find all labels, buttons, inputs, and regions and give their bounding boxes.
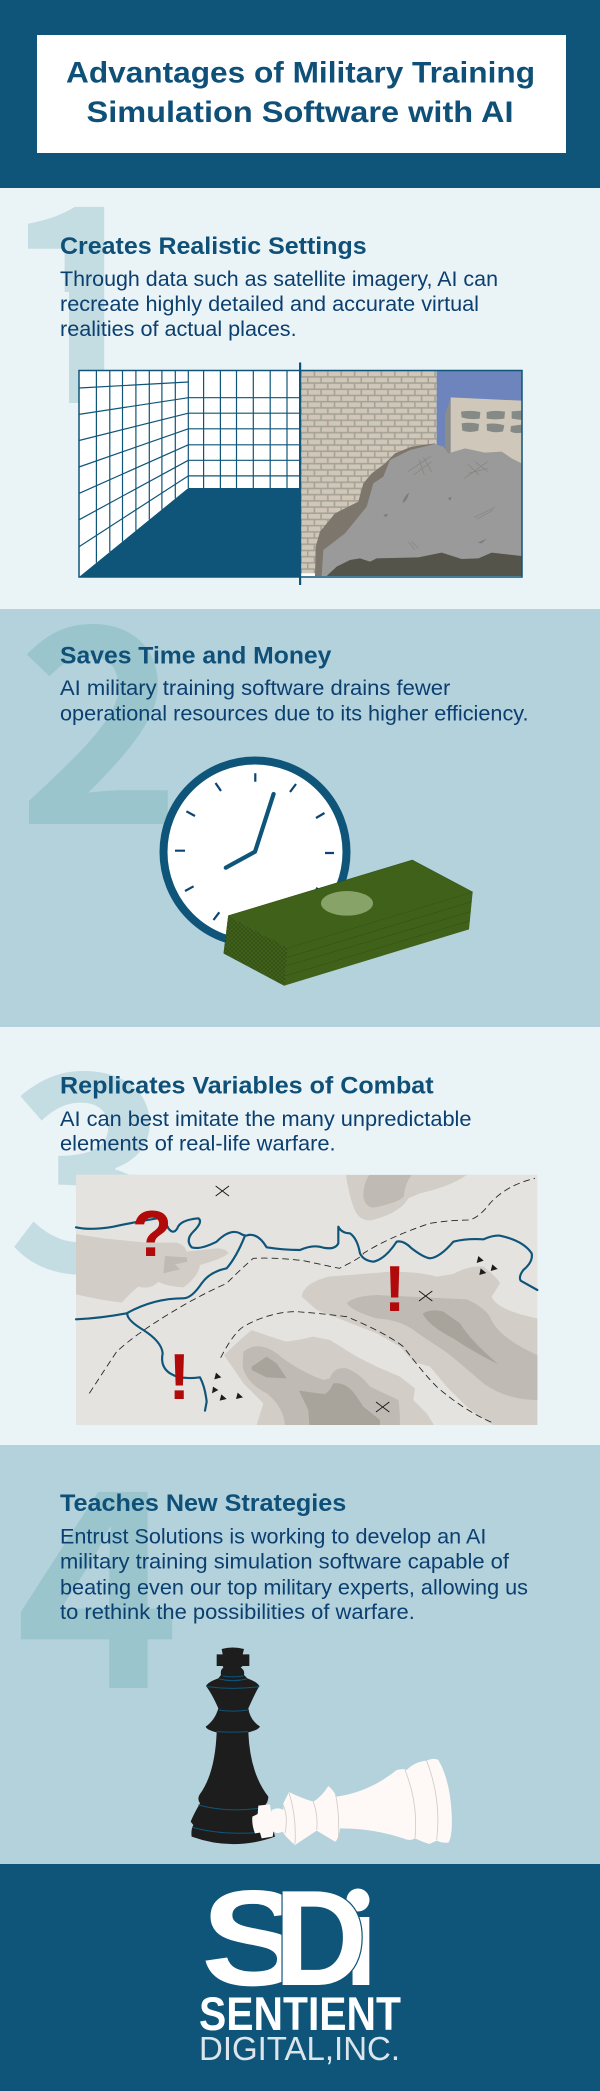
logo: SDi: i <box>344 1862 378 2014</box>
panel: creates realistic settings <box>28 206 523 585</box>
title box: Simulation Software with AI <box>86 96 514 129</box>
white king <box>252 1759 452 1845</box>
logo: SDi: S <box>201 1862 305 2014</box>
logo wordmark <box>199 1987 401 2067</box>
numeral 1: 1 <box>0 88 159 482</box>
x markers <box>216 1186 432 1412</box>
river <box>76 1218 537 1411</box>
body text 2 <box>60 677 528 726</box>
dashed routes <box>89 1178 535 1422</box>
troop markers <box>212 1256 498 1401</box>
illustration frame <box>79 370 522 577</box>
body text 2: operational resources due to its higher efficiency. <box>60 703 528 726</box>
map terrain and routes <box>76 1175 537 1425</box>
logo wordmark: SENTIENT <box>199 1987 401 2040</box>
title box: Advantages of Military Training <box>66 56 535 90</box>
logo: SDi <box>206 1888 370 1986</box>
body text 3: AI can best imitate the many unpredictable <box>60 1108 472 1131</box>
body text 1 <box>60 268 498 341</box>
heading 2: Saves Time and Money <box>60 642 332 669</box>
body text 1: recreate highly detailed and accurate virtual <box>60 293 479 316</box>
body text 4: military training simulation software capable of <box>60 1551 509 1574</box>
body text 4: beating even our top military experts, allowing us <box>60 1576 528 1599</box>
realistic ruined scene <box>301 371 522 576</box>
heading 3: Replicates Variables of Combat <box>60 1072 434 1099</box>
icon: chess kings <box>191 1647 452 1845</box>
body text 4: Entrust Solutions is working to develop an AI <box>60 1525 486 1548</box>
divider line <box>299 362 301 585</box>
logo: SDi: D <box>274 1862 367 2014</box>
illustration: virtual room vs real place <box>79 362 522 585</box>
heading 4: Teaches New Strategies <box>60 1490 346 1517</box>
numeral 2: 2 <box>17 509 182 903</box>
virtual grid room <box>79 370 300 577</box>
panel: teaches new strategies <box>0 1373 600 1864</box>
body text 3 <box>60 1108 472 1156</box>
numeral 3: 3 <box>7 956 172 1350</box>
logo wordmark: DIGITAL,INC. <box>199 2030 400 2067</box>
panel: replicates variables of combat <box>0 956 600 1445</box>
footer band <box>0 1862 600 2091</box>
black king <box>191 1647 275 1844</box>
body text 4: to rethink the possibilities of warfare. <box>60 1601 415 1624</box>
red exclamation mark right: ! <box>384 1252 406 1325</box>
body text 2: AI military training software drains fewer <box>60 677 450 700</box>
body text 4 <box>60 1525 528 1624</box>
illustration: terrain map <box>76 1175 537 1425</box>
body text 3: elements of real-life warfare. <box>60 1133 336 1156</box>
panel: saves time and money <box>0 509 600 1027</box>
header band <box>0 0 600 188</box>
body text 1: realities of actual places. <box>60 318 297 341</box>
body text 1: Through data such as satellite imagery, AI can <box>60 268 498 291</box>
numeral 4: 4 <box>15 1373 180 1767</box>
icon: clock <box>164 760 346 944</box>
title box <box>37 35 566 153</box>
red exclamation mark left: ! <box>168 1340 190 1413</box>
red question mark: ? <box>132 1197 172 1270</box>
heading 1: Creates Realistic Settings <box>60 233 367 260</box>
icon: stack of money <box>224 860 473 986</box>
